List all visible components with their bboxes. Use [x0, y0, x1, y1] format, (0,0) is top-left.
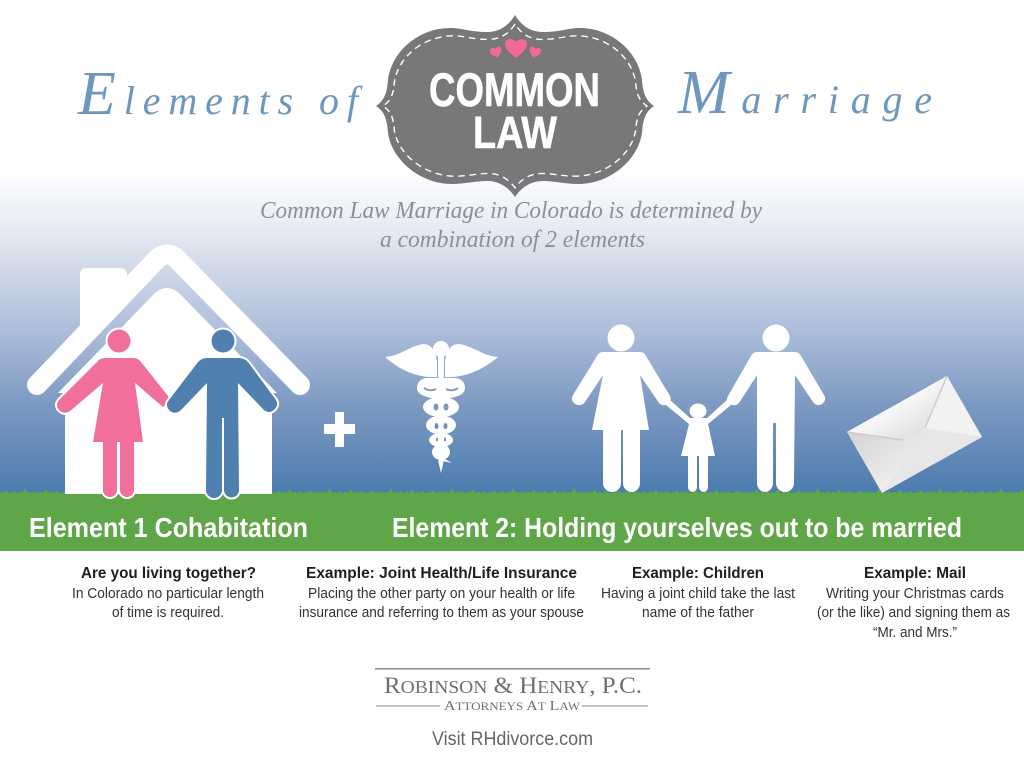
text block: insurance: Example: Joint Health/Life Insurance	[306, 565, 577, 582]
plus sign	[324, 412, 355, 447]
subtitle: a combination of 2 elements	[380, 227, 645, 253]
text block: insurance: insurance and referring to them as your spouse	[299, 605, 584, 621]
text block: living together: Are you living together?	[81, 565, 256, 582]
text block: mail: (or the like) and signing them as	[817, 605, 1010, 621]
icon: caduceus	[385, 341, 498, 473]
firm logo: ROBINSON & HENRY, P.C.	[384, 673, 642, 698]
text block: living together	[72, 565, 264, 621]
text block: mail: Example: Mail	[864, 565, 966, 582]
icon: envelope	[847, 376, 982, 493]
text block: mail: “Mr. and Mrs.”	[873, 625, 957, 641]
firm logo	[375, 668, 650, 714]
icon: man figure	[167, 330, 277, 498]
text block: children: Example: Children	[632, 565, 764, 582]
title badge: Common Law	[376, 15, 654, 197]
icon: family	[572, 324, 825, 492]
title: Marriage: M arriage	[677, 59, 932, 127]
band heading: element 1: Element 1 Cohabitation	[29, 512, 308, 543]
icon: woman figure	[57, 330, 169, 497]
icon: house	[37, 254, 300, 494]
text block: insurance: Placing the other party on your health or life	[308, 586, 575, 602]
background sky gradient	[0, 170, 1024, 495]
text block: living together: of time is required.	[112, 605, 224, 621]
firm logo: ATTORNEYS AT LAW	[444, 699, 580, 714]
website link text: Visit RHdivorce.com	[432, 729, 593, 750]
text block: mail: Writing your Christmas cards	[826, 586, 1004, 602]
grass band	[0, 486, 1024, 551]
subtitle	[260, 198, 762, 253]
subtitle: Common Law Marriage in Colorado is determined by	[260, 198, 762, 224]
title: Elements of: Elements of	[77, 60, 363, 128]
text block: children: name of the father	[642, 605, 754, 621]
band heading: element 2: Element 2: Holding yourselves out to be married	[392, 512, 962, 543]
text block: living together: In Colorado no particular length	[72, 586, 264, 602]
text block: children: Having a joint child take the last	[601, 586, 795, 602]
text block: children	[601, 565, 795, 621]
text block: insurance	[299, 565, 584, 621]
text block: mail	[817, 565, 1010, 641]
title badge: Common Law: LAW	[473, 107, 557, 158]
title badge: Common Law: COMMON	[429, 63, 600, 116]
